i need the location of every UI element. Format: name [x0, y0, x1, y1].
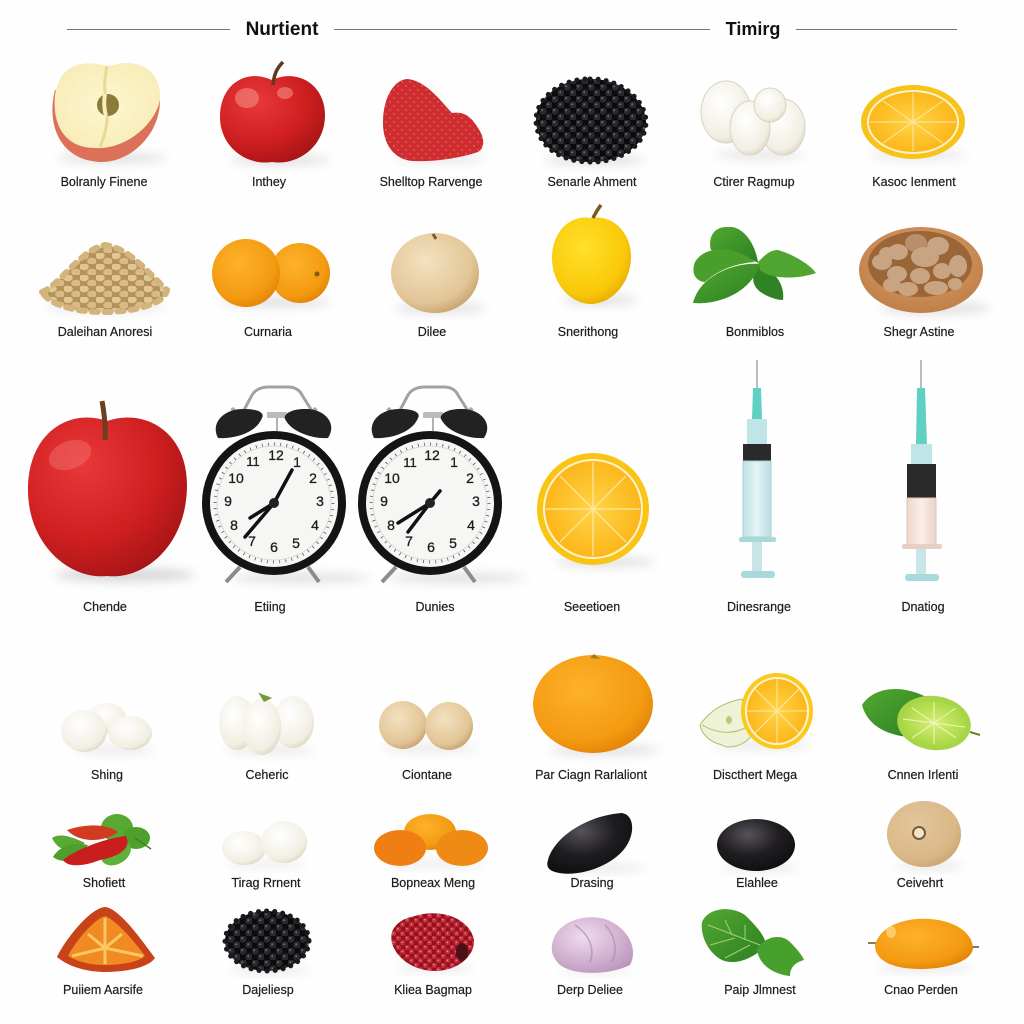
- item: alarm clock right: 5: [449, 535, 457, 551]
- label: Ciontane: [402, 768, 452, 782]
- item: alarm clock left: 10: [228, 470, 244, 486]
- label: Elahlee: [736, 876, 778, 890]
- item: alarm clock left: 8: [230, 517, 238, 533]
- label: Shofiett: [83, 876, 126, 890]
- label: Inthey: [252, 175, 287, 189]
- label: Tirag Rrnent: [231, 876, 301, 890]
- item: alarm clock right: 8: [387, 517, 395, 533]
- label: Ctirer Ragmup: [713, 175, 795, 189]
- label: Seeetioen: [564, 600, 620, 614]
- label: Chende: [83, 600, 127, 614]
- label: Senarle Ahment: [548, 175, 637, 189]
- item: alarm clock left: 2: [309, 470, 317, 486]
- label: Discthert Mega: [713, 768, 797, 782]
- item: alarm clock right: 1: [450, 454, 458, 470]
- label: Shegr Astine: [884, 325, 954, 339]
- item: red chilies with leaves: [52, 814, 151, 890]
- label: Dilee: [418, 325, 446, 339]
- label: Paip Jlmnest: [724, 983, 796, 997]
- label: Dinesrange: [727, 600, 791, 614]
- label: Drasing: [570, 876, 614, 890]
- item: red apple: [220, 62, 330, 189]
- item: alarm clock left: 1: [293, 454, 301, 470]
- label: Ceivehrt: [897, 876, 944, 890]
- item: big red apple: [28, 401, 195, 614]
- item: round tan fruit: [391, 233, 485, 339]
- item: alarm clock right: 11: [403, 455, 417, 470]
- item: large orange: [533, 654, 660, 782]
- item: alarm clock right: 9: [380, 493, 388, 509]
- item: tan button seed: [887, 801, 964, 890]
- item: alarm clock left: 11: [246, 454, 260, 469]
- label: Shelltop Rarvenge: [380, 175, 482, 189]
- item: syringe peach: [901, 360, 945, 614]
- item: black olive: [717, 819, 798, 890]
- item: alarm clock left: [202, 387, 370, 614]
- item: lime and leaf: [862, 689, 980, 782]
- label: Dajeliesp: [242, 983, 294, 997]
- item: orange pills: [374, 814, 488, 890]
- label: Cnnen Irlenti: [888, 768, 958, 782]
- label: Bonmiblos: [726, 325, 784, 339]
- item: white eggs: [222, 821, 307, 890]
- label: Shing: [91, 768, 123, 782]
- label: Curnaria: [244, 325, 292, 339]
- item: alarm clock left: 6: [270, 539, 278, 555]
- item: alarm clock left: 4: [311, 517, 319, 533]
- label: Bopneax Meng: [391, 876, 475, 890]
- label: Kasoc Ienment: [872, 175, 956, 189]
- item: raspberry: [391, 913, 474, 997]
- item: strawberry: [380, 79, 485, 189]
- label: Bolranly Finene: [61, 175, 147, 189]
- item: alarm clock left: 12: [268, 447, 284, 463]
- item: alarm clock left: 7: [248, 533, 256, 549]
- item: cut apple: [52, 63, 167, 189]
- item: garlic cloves: [219, 692, 315, 782]
- label: Daleihan Anoresi: [58, 325, 152, 339]
- item: pink shape: [552, 917, 633, 997]
- item: lemon halves: [700, 673, 813, 782]
- item: green leaves: [693, 227, 816, 339]
- label: Etiing: [254, 600, 286, 614]
- item: orange capsule: [868, 919, 979, 997]
- label: Snerithong: [558, 325, 618, 339]
- label: Puiiem Aarsife: [63, 983, 143, 997]
- item: basil leaves: [702, 909, 804, 997]
- item: blackberry: [225, 911, 310, 997]
- item: alarm clock left: 9: [224, 493, 232, 509]
- label: Dunies: [416, 600, 454, 614]
- item: blackberry cluster: [536, 79, 646, 189]
- item: red-orange wedge: [57, 907, 155, 997]
- item: syringe blue: [727, 360, 791, 614]
- item: pile of beans: [42, 245, 167, 339]
- item: alarm clock left: 3: [316, 493, 324, 509]
- item: white cloves: [701, 81, 805, 189]
- item: alarm clock right: 12: [424, 447, 440, 463]
- item: two potatoes: [379, 701, 478, 782]
- item: alarm clock right: 3: [472, 493, 480, 509]
- item: white mushrooms: [61, 703, 155, 782]
- item: alarm clock right: 4: [467, 517, 475, 533]
- item: bowl of nuts: [859, 227, 990, 339]
- item: yellow fruit: [552, 205, 638, 339]
- item: orange slice: [861, 85, 966, 189]
- item: alarm clock right: 10: [384, 470, 400, 486]
- title: Nutrient: Nurtient: [246, 19, 319, 40]
- item: alarm clock right: 2: [466, 470, 474, 486]
- label: Par Ciagn Rarlaliont: [535, 768, 647, 782]
- item: two oranges: [212, 239, 330, 339]
- item: dark aubergine: [547, 813, 645, 890]
- title: Timing: Timirg: [726, 19, 780, 39]
- item: alarm clock right: 7: [405, 533, 413, 549]
- label: Kliea Bagmap: [394, 983, 472, 997]
- item: alarm clock right: [358, 387, 526, 614]
- item: alarm clock right: 6: [427, 539, 435, 555]
- label: Ceheric: [245, 768, 289, 782]
- item: alarm clock left: 5: [292, 535, 300, 551]
- label: Derp Deliee: [557, 983, 623, 997]
- label: Cnao Perden: [884, 983, 958, 997]
- label: Dnatiog: [901, 600, 945, 614]
- item: large orange slice: [537, 453, 655, 614]
